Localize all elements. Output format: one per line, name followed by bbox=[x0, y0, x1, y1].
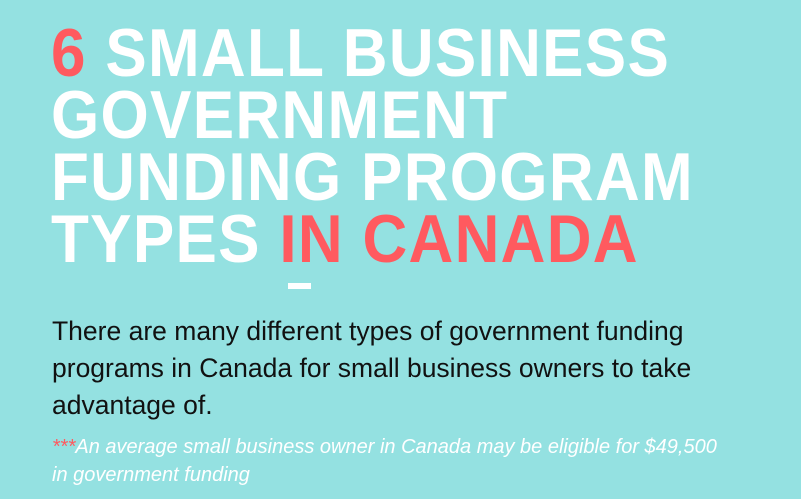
title bbox=[51, 16, 694, 277]
footnote: ***An average small business owner in Canada may be eligible for $49,500 in government funding bbox=[52, 436, 717, 486]
intro paragraph: There are many different types of government funding programs in Canada for small business owners to take advantage of. bbox=[52, 316, 691, 420]
title: 6 SMALL BUSINESS bbox=[51, 16, 670, 91]
title: GOVERNMENT bbox=[51, 78, 508, 153]
title: FUNDING PROGRAM bbox=[51, 140, 694, 215]
dash divider bbox=[288, 283, 311, 289]
title: TYPES IN CANADA bbox=[51, 202, 639, 277]
